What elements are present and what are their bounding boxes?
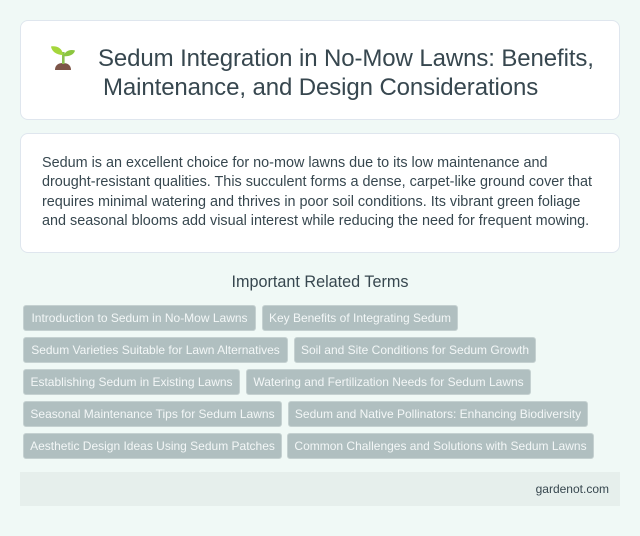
tag [23,305,256,331]
intro text panel [20,133,620,253]
intro paragraph: Sedum is an excellent choice for no-mow lawns due to its low maintenance and [42,155,548,171]
tag: Seasonal Maintenance Tips for Sedum Lawns [30,407,275,421]
tag: Key Benefits of Integrating Sedum [269,311,451,325]
intro paragraph: and seasonal blooms add visual interest while reducing the need for frequent mowing. [42,213,589,229]
title: Maintenance, and Design Considerations [103,74,538,101]
tag: Watering and Fertilization Needs for Sedum Lawns [253,375,524,389]
tag [23,369,240,395]
tag [287,433,594,459]
footer credit: gardenot.com [536,482,609,496]
tag: Aesthetic Design Ideas Using Sedum Patches [30,439,275,453]
tag [23,401,282,427]
tag: Sedum and Native Pollinators: Enhancing Biodiversity [295,407,581,421]
tag: Common Challenges and Solutions with Sedum Lawns [294,439,587,453]
tag: Sedum Varieties Suitable for Lawn Alternatives [31,343,280,357]
tag [246,369,531,395]
tag: Introduction to Sedum in No-Mow Lawns [31,311,248,325]
header panel [20,20,620,120]
title: Sedum Integration in No-Mow Lawns: Benefits, [98,45,594,72]
title [98,45,594,101]
related terms heading: Important Related Terms [232,273,408,291]
tag [262,305,458,331]
intro paragraph: drought-resistant qualities. This succulent forms a dense, carpet-like ground cover that [42,174,592,190]
intro paragraph: requires minimal watering and thrives in poor soil conditions. Its vibrant green foliage [42,194,580,210]
related term tags [23,305,594,459]
footer bar [20,472,620,506]
icon: seedling [51,46,75,70]
tag [23,337,288,363]
intro paragraph [42,155,592,229]
tag: Establishing Sedum in Existing Lawns [30,375,233,389]
tag [288,401,588,427]
tag [294,337,536,363]
tag [23,433,282,459]
tag: Soil and Site Conditions for Sedum Growth [301,343,529,357]
